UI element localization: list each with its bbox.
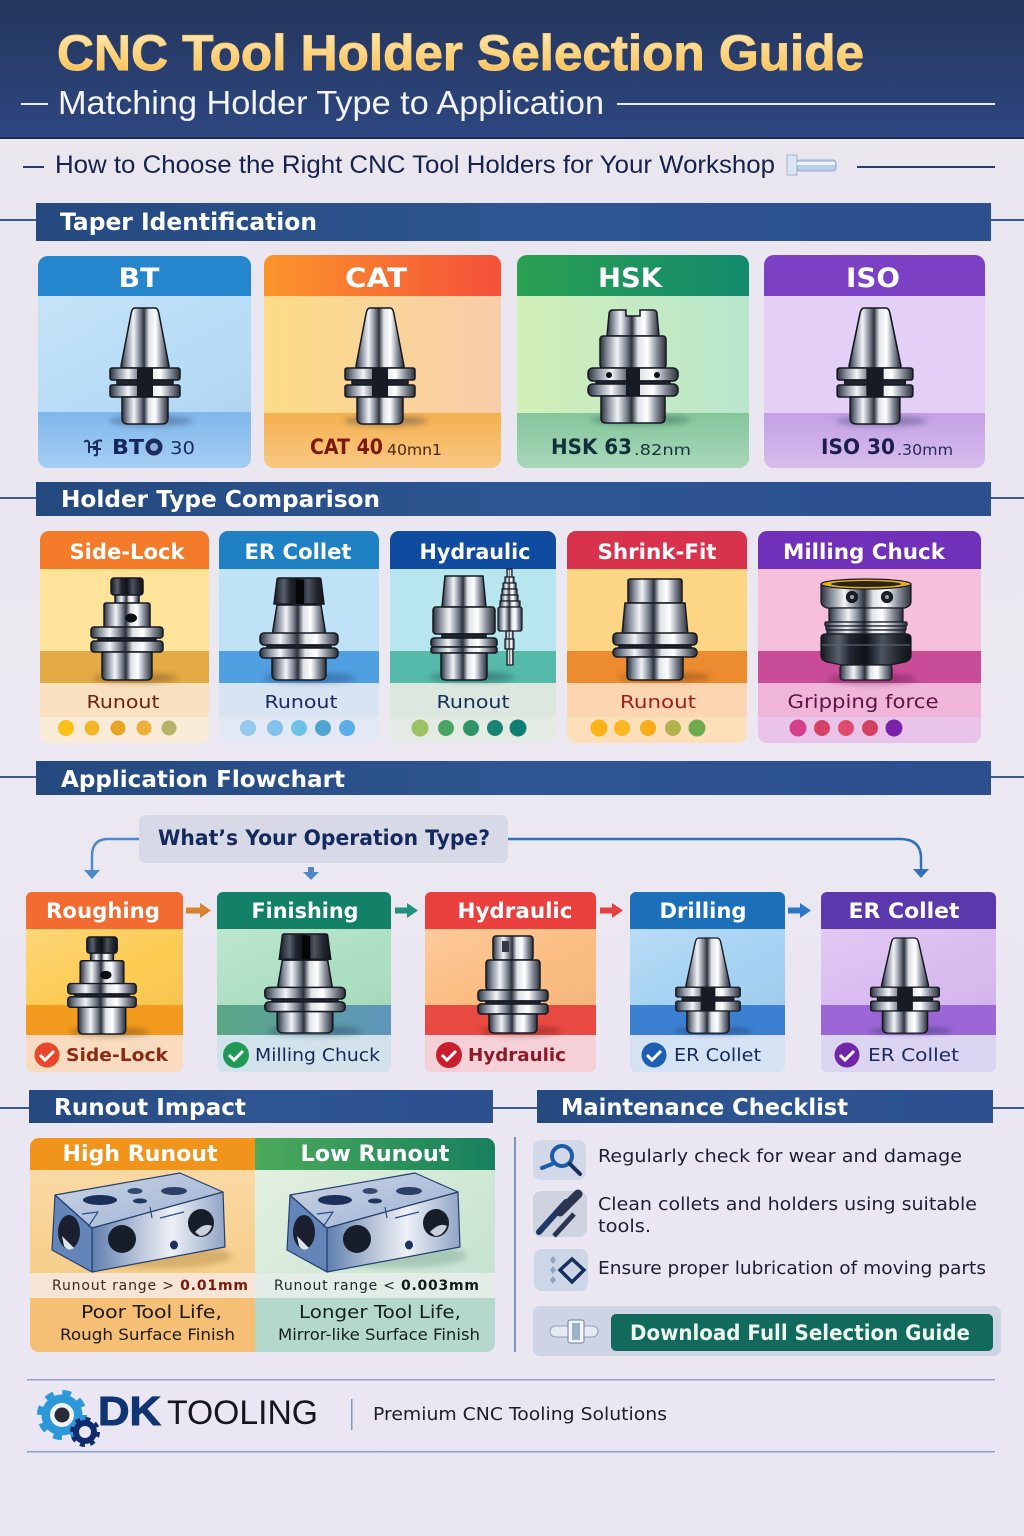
panel: Hydraulic card: [390, 531, 556, 743]
effects: high runout: [60, 1302, 235, 1344]
flow step: Hydraulic: Hydraulic: [458, 899, 572, 923]
rating: Runout: [58, 692, 176, 736]
flow step: ER Collet: [821, 892, 996, 1072]
panel: Side-Lock card: Side-Lock: [70, 540, 186, 564]
label: CAT 40: [310, 438, 440, 455]
section heading: Runout Impact: [0, 1090, 537, 1123]
panel: BT taper card: [38, 256, 251, 468]
footer: [27, 1379, 995, 1452]
effects: high runout: Poor Tool Life,: [81, 1302, 222, 1323]
rating: Runout: Runout: [436, 692, 510, 713]
panel: CAT taper card: CAT: [345, 263, 408, 294]
panel: Milling Chuck card: Milling Chuck: [783, 540, 946, 564]
arrow: Roughing to Finishing: [186, 903, 211, 918]
section heading: Runout Impact: Runout Impact: [54, 1095, 246, 1121]
arrow: Finishing to Hydraulic: [395, 903, 418, 918]
logo: DK: [98, 1388, 161, 1434]
flow step: Roughing: Roughing: [46, 899, 160, 923]
flow step: Drilling: [630, 892, 785, 1072]
effects: high runout: Rough Surface Finish: [60, 1325, 235, 1344]
arrow: question to Roughing: [84, 839, 139, 879]
column: Low Runout: Low Runout: [300, 1142, 450, 1167]
runout range: low: Runout range < 0.003mm: [274, 1278, 479, 1294]
effects: low runout: Mirror-like Surface Finish: [278, 1325, 480, 1344]
label: BT 30: [84, 438, 194, 456]
recommendation: ER Collet: [834, 1042, 959, 1068]
column: High Runout: [30, 1138, 255, 1352]
holder: Milling Chuck: [821, 579, 916, 684]
arrow: question to Finishing: [303, 867, 319, 880]
rating: Gripping force: Gripping force: [788, 691, 938, 713]
header banner: [0, 0, 1024, 139]
holder: Hydraulic: [478, 936, 561, 1036]
rating: Gripping force: [788, 691, 938, 736]
button: download: Download Full Selection Guide: [630, 1321, 970, 1345]
rating: Runout: Runout: [620, 692, 696, 713]
runout range: high: Runout range > 0.01mm: [52, 1278, 248, 1294]
panel: Hydraulic card: Hydraulic: [420, 540, 530, 564]
label: ISO 30: [822, 438, 952, 455]
label: CAT 40: CAT 40: [310, 435, 383, 459]
flowchart question box: What’s Your Operation Type?: [158, 826, 490, 850]
holder: ISO: [836, 308, 927, 426]
section heading: Application Flowchart: [0, 761, 1024, 795]
recommendation: Milling Chuck: [223, 1042, 381, 1068]
holder: CAT: [344, 308, 428, 426]
arrow: Hydraulic to Drilling: [600, 903, 623, 918]
checklist item: clean: Clean collets and holders using suitable: [598, 1194, 977, 1215]
label: CAT 40: 40mn1: [387, 441, 442, 459]
recommendation: Milling Chuck: Milling Chuck: [255, 1045, 381, 1066]
download strip: [533, 1306, 1001, 1356]
recommendation: Hydraulic: [436, 1042, 566, 1068]
logo: TOOLING: [167, 1394, 318, 1432]
panel: HSK taper card: HSK: [598, 263, 663, 294]
checklist item: lubricate: [534, 1249, 986, 1291]
flow step: Finishing: [217, 892, 391, 1072]
icon: gears: [40, 1393, 98, 1445]
icon: tool holder: [787, 155, 836, 175]
section heading: Taper Identification: Taper Identification: [60, 208, 317, 236]
checklist item: clean: [533, 1191, 977, 1237]
flow step: Hydraulic: [425, 892, 596, 1072]
checklist item: inspect: Regularly check for wear and damage: [598, 1146, 962, 1167]
column: High Runout: High Runout: [62, 1142, 218, 1167]
label: HSK 63: HSK 63: [551, 435, 632, 459]
flow step: Finishing: Finishing: [252, 899, 358, 923]
section heading: Holder Type Comparison: [0, 482, 1024, 516]
holder: ER Collet: [260, 578, 355, 683]
holder: Drilling: [675, 938, 752, 1035]
label: BT 30: 30: [170, 438, 195, 459]
holder: BT: [109, 308, 193, 426]
holder: Side-Lock: [68, 937, 150, 1037]
panel: Side-Lock card: [40, 531, 209, 743]
panel: CAT taper card: [264, 255, 501, 468]
panel: Shrink-Fit card: [567, 531, 747, 743]
rating: Runout: Runout: [86, 692, 160, 713]
label: HSK 63: [552, 438, 690, 455]
flow step: Roughing: [26, 892, 183, 1072]
icon: hydraulic fitting: [498, 569, 522, 665]
checklist item: inspect: [533, 1140, 962, 1180]
recommendation: Side-Lock: Side-Lock: [66, 1045, 169, 1066]
flowchart question box: [139, 815, 508, 863]
recommendation: Side-Lock: [34, 1042, 169, 1068]
holder: Hydraulic: [430, 576, 514, 682]
section heading: Maintenance Checklist: [537, 1090, 1024, 1123]
label: ISO 30: .30mm: [897, 441, 953, 459]
section heading: Application Flowchart: Application Flowchart: [61, 767, 345, 793]
icon: lubrication diamond: [534, 1249, 588, 1291]
intro line: How to Choose the Right CNC Tool Holders for Your Workshop: [55, 151, 775, 179]
panel: Milling Chuck card: [758, 531, 981, 743]
rating: Runout: [240, 692, 355, 736]
section heading: Maintenance Checklist: Maintenance Checklist: [561, 1095, 848, 1121]
panel: ISO taper card: [764, 255, 985, 468]
checklist item: clean: tools.: [598, 1216, 651, 1237]
holder: Side-Lock: [91, 578, 177, 683]
holder: ER Collet: [265, 934, 363, 1036]
arrow: Drilling to ER Collet: [788, 903, 811, 918]
tagline: Premium CNC Tooling Solutions: [373, 1404, 667, 1425]
label: ISO 30: ISO 30: [821, 435, 895, 459]
arrow: question to ER Collet: [508, 839, 929, 878]
holder: ER Collet: [870, 938, 952, 1035]
icon: cleaning tool: [533, 1191, 587, 1237]
checklist item: lubricate: Ensure proper lubrication of moving parts: [598, 1258, 986, 1279]
title: CNC Tool Holder Selection Guide: [57, 25, 864, 81]
panel: runout comparison: [30, 1138, 495, 1352]
flow step: ER Collet: ER Collet: [848, 899, 960, 923]
recommendation: ER Collet: ER Collet: [674, 1045, 761, 1066]
column: Low Runout: [255, 1138, 495, 1352]
effects: low runout: Longer Tool Life,: [299, 1302, 461, 1323]
machined block: smooth: [287, 1173, 467, 1272]
recommendation: ER Collet: ER Collet: [868, 1045, 959, 1066]
icon: holder: [550, 1320, 598, 1343]
panel: BT taper card: BT: [118, 263, 160, 294]
label: HSK 63: .82nm: [634, 441, 691, 459]
panel: ER Collet card: [219, 531, 379, 743]
panel: ISO taper card: ISO: [846, 263, 900, 294]
icon: magnifier: [533, 1140, 586, 1180]
section heading: Holder Type Comparison: Holder Type Comparison: [61, 487, 380, 513]
panel: HSK taper card: [517, 255, 749, 468]
recommendation: Hydraulic: Hydraulic: [468, 1045, 566, 1066]
effects: low runout: [278, 1302, 480, 1344]
recommendation: ER Collet: [642, 1042, 761, 1068]
subtitle: Matching Holder Type to Application: [58, 84, 604, 121]
section heading: Taper Identification: [0, 203, 1024, 241]
logo: [40, 1388, 318, 1445]
holder: HSK: [588, 310, 691, 425]
button: download: [611, 1314, 993, 1351]
rating: Runout: [590, 692, 706, 736]
panel: Shrink-Fit card: Shrink-Fit: [598, 540, 716, 564]
rating: Runout: [412, 692, 526, 736]
holder: Shrink-Fit: [613, 579, 711, 682]
flow step: Drilling: Drilling: [660, 899, 746, 923]
panel: ER Collet card: ER Collet: [244, 540, 352, 564]
label: BT 30: BT: [112, 435, 144, 459]
rating: Runout: Runout: [264, 692, 338, 713]
machined block: rough: [52, 1173, 232, 1272]
